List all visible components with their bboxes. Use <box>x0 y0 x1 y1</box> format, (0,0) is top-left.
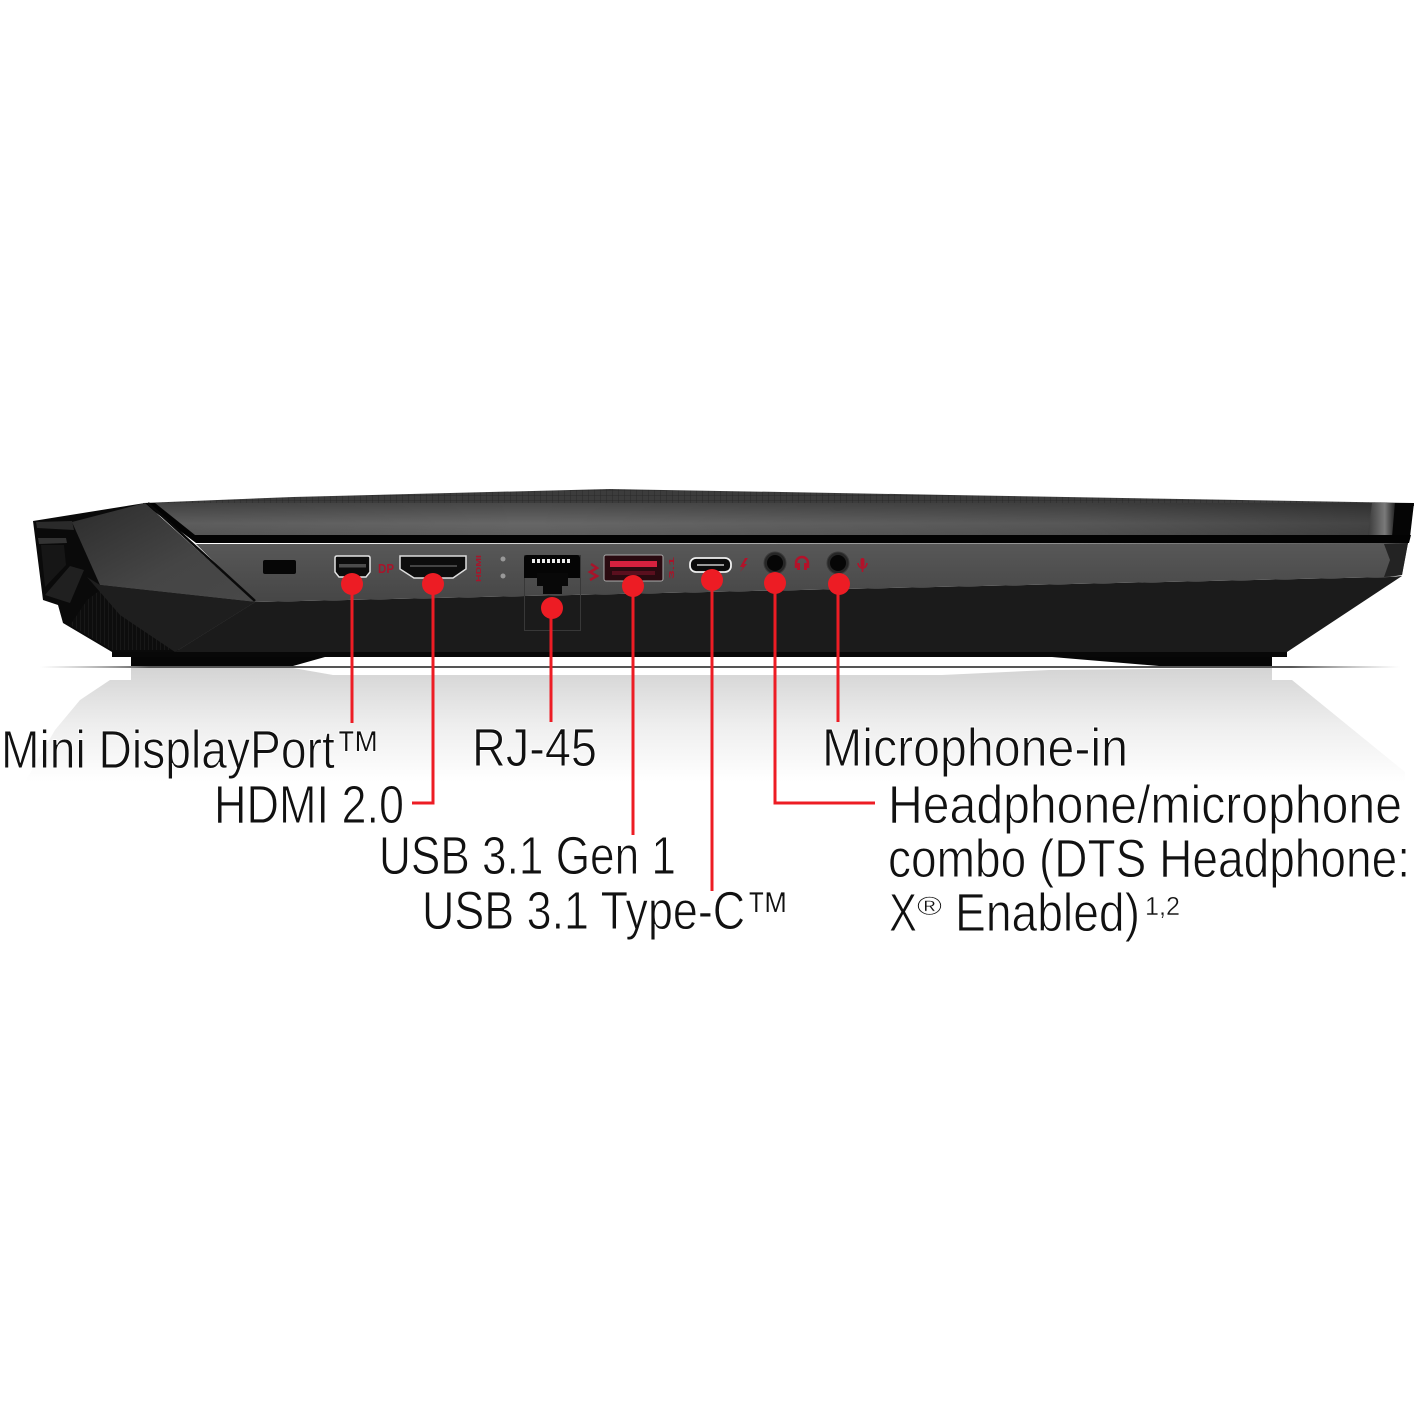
rear upper strip <box>36 521 74 530</box>
headphone jack <box>764 552 786 574</box>
network icon <box>590 564 597 580</box>
lower body <box>175 576 1402 652</box>
label: USB 3.1 Type-C: USB 3.1 Type-C™ <box>422 881 790 941</box>
label: Headphone/microphone combo <box>888 775 1410 943</box>
ground line <box>40 666 1400 668</box>
label: Headphone/microphone combo: 1,2 <box>1145 891 1180 921</box>
base bottom edge <box>112 652 1287 657</box>
status leds <box>500 556 506 578</box>
thunderbolt icon <box>740 558 748 572</box>
rear lower strip <box>38 538 67 544</box>
deck right corner <box>1384 543 1408 577</box>
microphone jack <box>827 552 849 574</box>
wedge upper facet <box>72 503 255 602</box>
rear silhouette <box>33 503 255 652</box>
label: Mini DisplayPort: Mini DisplayPort™ <box>1 720 381 780</box>
rear opening <box>41 545 66 587</box>
headphone icon <box>796 557 808 570</box>
deck <box>196 543 1408 602</box>
feet <box>131 650 1272 666</box>
label: Headphone/microphone combo: Enabled) <box>955 883 1140 943</box>
rj-45 port <box>524 555 580 630</box>
vent grille <box>70 590 172 650</box>
gap between lid and base <box>143 503 1411 543</box>
lid corner highlight <box>1368 503 1396 535</box>
usb-c port <box>690 558 731 572</box>
mini displayport <box>335 556 370 577</box>
usb 3.1 gen 1 port <box>604 555 663 581</box>
lid shading <box>155 503 1395 537</box>
label: Headphone/microphone combo: X <box>889 883 917 943</box>
lock slot <box>263 560 296 574</box>
label: USB 3.1 Gen 1: USB 3.1 Gen 1 <box>379 826 676 886</box>
lid hinge corner <box>1392 503 1414 537</box>
callout dots <box>341 569 850 619</box>
label: RJ-45: RJ-45 <box>472 718 597 778</box>
lid face <box>155 503 1395 537</box>
lid mesh top <box>143 489 1414 506</box>
label: Microphone-in: Microphone-in <box>822 718 1128 778</box>
label: Headphone/microphone combo: ® <box>917 891 942 921</box>
wedge lower facet <box>87 577 255 652</box>
laptop body <box>33 489 1414 666</box>
callout leader lines <box>352 580 875 891</box>
displayport icon: DP <box>378 561 394 576</box>
floor reflection <box>25 668 1405 782</box>
hdmi port <box>400 556 466 578</box>
label: HDMI 2.0: HDMI 2.0 <box>214 775 404 835</box>
usb label: 3.1 <box>669 557 676 579</box>
microphone icon <box>858 558 867 572</box>
hdmi label: HDMI <box>476 555 483 582</box>
rear small facet <box>45 566 84 603</box>
wedge edge <box>148 503 255 601</box>
